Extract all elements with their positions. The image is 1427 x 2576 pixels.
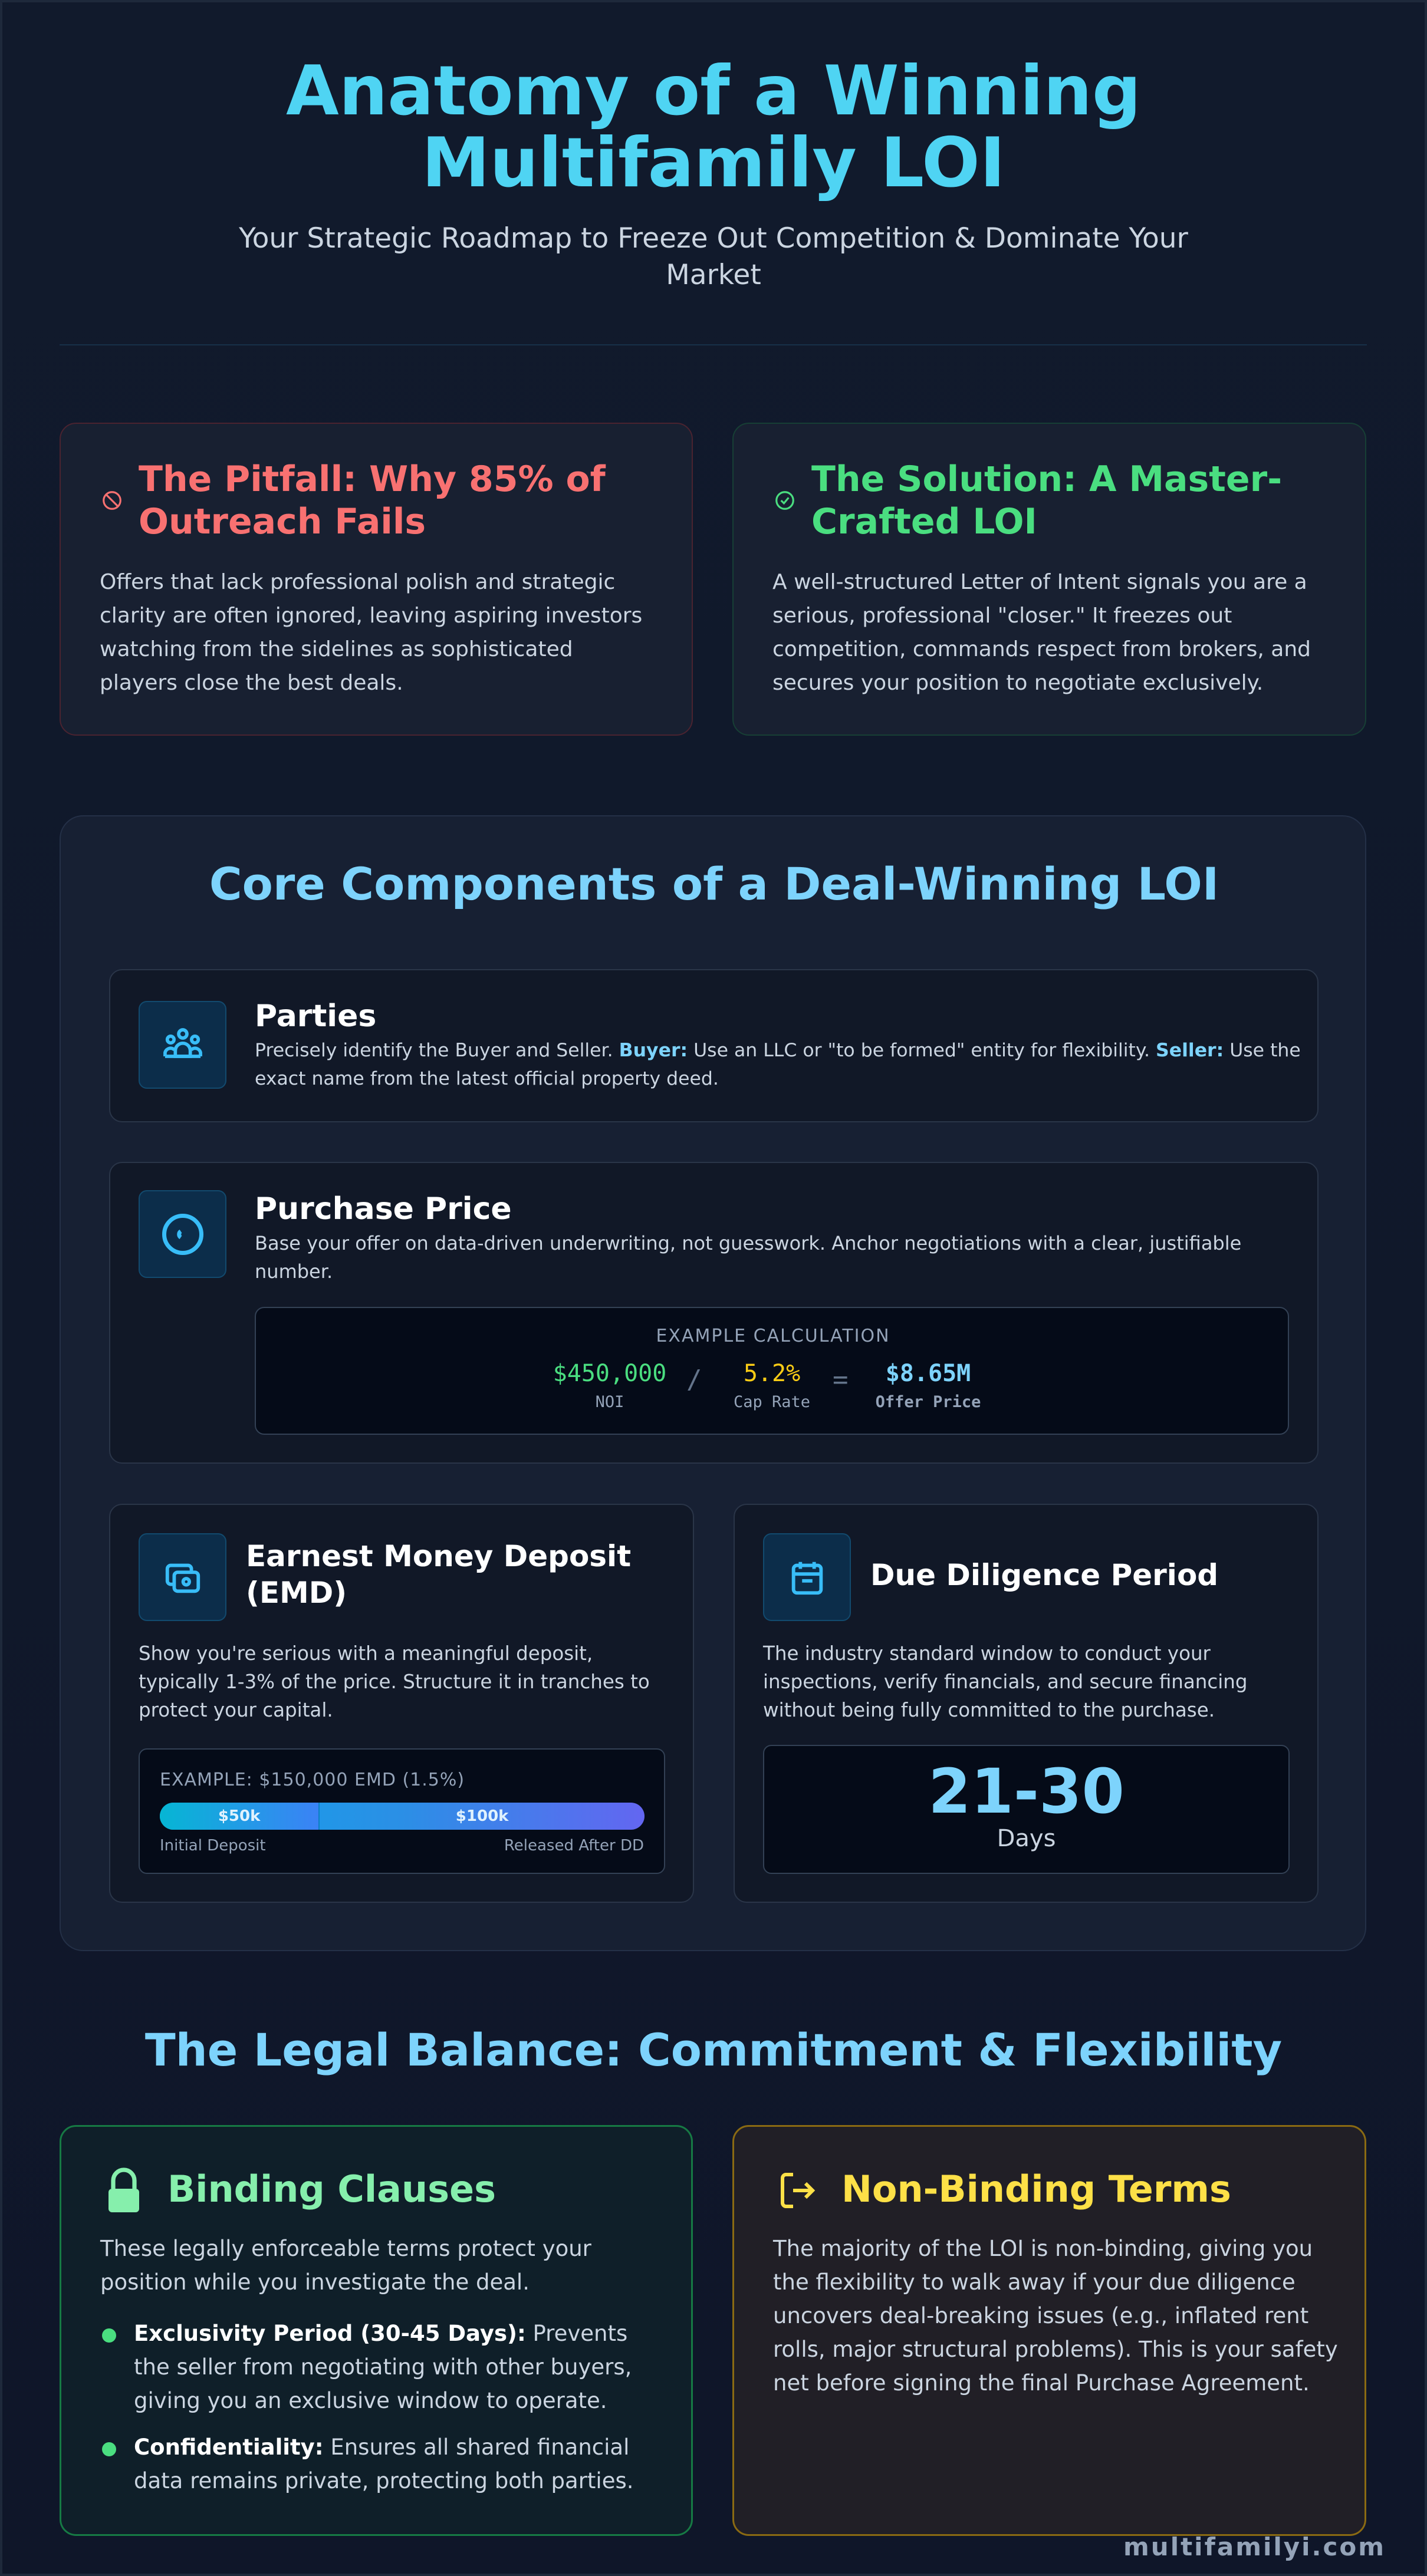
text: EMD: Show you're serious with a meaningful deposit, typically 1-3% of the price. Structure it in tranches to protect your capital.	[139, 1642, 650, 1721]
chart: EMD tranches: $100k	[456, 1807, 508, 1825]
icon: calendar	[763, 1533, 851, 1621]
value: cap rate: 5.2%	[744, 1360, 800, 1387]
title: due diligence: Due Diligence Period	[870, 1558, 1218, 1592]
example calculation: EXAMPLE CALCULATION	[656, 1326, 890, 1346]
value: offer price: $8.65M	[886, 1360, 971, 1387]
panel: pitfall	[60, 423, 693, 736]
text: solution body: A well-structured Letter of Intent signals you are a serious, professional "closer." It freezes out competition, commands respect from brokers, and secures your position to negotiate exclusively.	[772, 570, 1311, 695]
text: purchase price: Base your offer on data-driven underwriting, not guesswork. Anchor negotiations with a clear, justifiable number.	[255, 1232, 1241, 1283]
icon: prohibited	[103, 491, 121, 510]
text: binding intro: These legally enforceable terms protect your position while you investigate the deal.	[100, 2236, 591, 2295]
value: NOI	[553, 1360, 666, 1411]
value: offer price	[876, 1360, 981, 1411]
icon: lock	[108, 2167, 139, 2212]
list: binding clauses	[102, 2321, 634, 2493]
stat: 21-30 days	[763, 1745, 1290, 1874]
card: due diligence	[734, 1504, 1319, 1903]
heading: legal balance: The Legal Balance: Commitment & Flexibility	[145, 2024, 1282, 2076]
title: Multifamily LOI	[422, 123, 1005, 203]
chart: EMD tranches	[139, 1748, 665, 1874]
icon: money	[139, 1533, 226, 1621]
panel: solution	[732, 423, 1366, 736]
value: cap rate: Cap Rate	[734, 1393, 810, 1411]
value: offer price: Offer Price	[876, 1393, 981, 1411]
heading: core components: Core Components of a Deal-Winning LOI	[209, 858, 1219, 910]
stat: 21-30 days: Days	[997, 1825, 1056, 1852]
footer: brand: multifamilyi.com	[1123, 2532, 1386, 2561]
chart: EMD tranches: $50k	[218, 1807, 260, 1825]
heading: pitfall: The Pitfall: Why 85% of Outreach Fails	[139, 459, 606, 542]
icon: exit	[781, 2173, 815, 2208]
example calculation	[255, 1307, 1289, 1435]
title: EMD: Earnest Money Deposit (EMD)	[246, 1539, 631, 1610]
value: cap rate	[734, 1360, 810, 1411]
list: binding clauses: Exclusivity Period (30-45 Days): Prevents the seller from negotiating with other buyers, giving you an exclusive window to operate.	[134, 2321, 632, 2413]
value: NOI: NOI	[596, 1393, 624, 1411]
title	[286, 51, 1141, 203]
title: parties: Parties	[255, 999, 376, 1034]
title: Anatomy of a Winning	[286, 51, 1141, 131]
value: NOI: $450,000	[553, 1360, 666, 1387]
chart: EMD tranches: EXAMPLE: $150,000 EMD (1.5%)	[160, 1770, 465, 1790]
text: pitfall body: Offers that lack professional polish and strategic clarity are often ignored, leaving aspiring investors watching from the sidelines as sophisticated players close the best deals.	[100, 570, 642, 695]
example calculation: =	[833, 1365, 848, 1395]
card: purchase price	[109, 1162, 1319, 1464]
icon: check	[775, 491, 794, 510]
stat: 21-30 days: 21-30	[928, 1755, 1124, 1827]
icon: gauge	[139, 1190, 226, 1278]
subtitle: Your Strategic Roadmap to Freeze Out Competition & Dominate Your Market	[239, 222, 1188, 291]
card: EMD	[109, 1504, 694, 1903]
chart: EMD tranches: Initial Deposit	[160, 1837, 266, 1854]
card: parties	[109, 969, 1319, 1122]
title: purchase price: Purchase Price	[255, 1191, 512, 1227]
title: binding: Binding Clauses	[167, 2167, 496, 2211]
example calculation: /	[686, 1365, 702, 1395]
heading: solution: The Solution: A Master-Crafted LOI	[811, 459, 1282, 542]
text: parties: Precisely identify the Buyer and Seller. Buyer: Use an LLC or "to be formed" entity for flexibility. Seller: Use the exact name from the latest official property deed.	[255, 1040, 1301, 1089]
chart: EMD tranches: Released After DD	[504, 1837, 644, 1854]
panel: binding clauses	[60, 2125, 693, 2536]
list: binding clauses: Confidentiality: Ensures all shared financial data remains private, protecting both parties.	[134, 2435, 634, 2493]
panel: non-binding terms	[732, 2125, 1366, 2536]
panel: core components	[60, 815, 1366, 1951]
text: non-binding: The majority of the LOI is non-binding, giving you the flexibility to walk away if your due diligence uncovers deal-breaking issues (e.g., inflated rent rolls, major structural problems). This is your safety net before signing the final Purchase Agreement.	[773, 2236, 1338, 2396]
icon: people	[139, 1001, 226, 1089]
text: due diligence: The industry standard window to conduct your inspections, verify financials, and secure financing without being fully committed to the purchase.	[763, 1642, 1248, 1721]
title: non-binding: Non-Binding Terms	[841, 2167, 1231, 2211]
